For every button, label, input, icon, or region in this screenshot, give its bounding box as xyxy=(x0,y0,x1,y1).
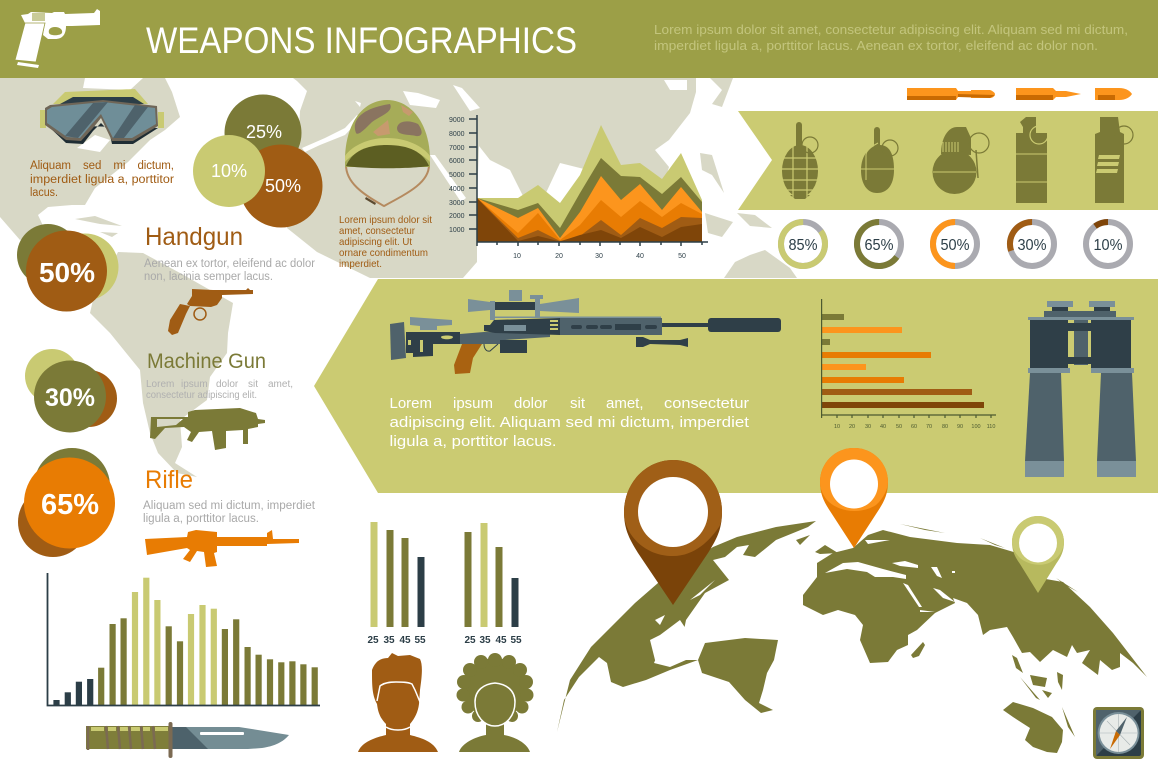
heading: handgun block xyxy=(144,223,315,283)
heading: machine gun block: ipsum xyxy=(181,379,208,390)
title: WEAPONS INFOGRAPHICS xyxy=(146,20,577,61)
stacked area chart: 9000 xyxy=(449,117,465,124)
percentage bubble cluster: 10% xyxy=(211,161,247,181)
horizontal bar chart: 60 xyxy=(911,424,917,430)
stacked area chart: 6000 xyxy=(449,158,465,165)
horizontal bar chart: 70 xyxy=(926,424,932,430)
panel: grenades chevron xyxy=(738,111,1158,210)
world map xyxy=(557,521,1147,753)
icon: compass xyxy=(1093,707,1144,759)
column chart: male ages: 35 xyxy=(383,635,395,646)
column chart: female ages: 45 xyxy=(495,635,507,646)
sniper description text: Lorem xyxy=(390,395,432,412)
bubble: 65% rifle: 65% xyxy=(41,489,99,521)
column chart: male ages xyxy=(367,522,426,646)
icon: machine gun xyxy=(150,408,265,450)
donut: 10% xyxy=(1077,213,1139,275)
bubble: 65% rifle xyxy=(18,448,115,557)
sniper description text: amet, xyxy=(606,395,644,412)
header intro text: Lorem ipsum dolor sit amet, consectetur adipiscing elit. Aliquam sed mi dictum, xyxy=(654,23,1128,37)
helmet caption: imperdiet. xyxy=(339,258,382,270)
sniper description text: sit xyxy=(570,395,586,412)
heading: rifle block: ligula a, porttitor lacus. xyxy=(143,513,259,525)
heading: machine gun block: consectetur adipiscing elit. xyxy=(146,390,257,401)
bubble: 50% handgun xyxy=(17,224,118,312)
horizontal bar chart: 30 xyxy=(865,424,871,430)
heading: machine gun block: Lorem xyxy=(146,379,174,390)
pin: olive xyxy=(1012,516,1064,593)
panel: sniper rifle arrow xyxy=(314,279,1158,493)
horizontal bar chart: 80 xyxy=(942,424,948,430)
stacked area chart: 8000 xyxy=(449,131,465,138)
sniper description text: dolor xyxy=(514,395,547,412)
donut: 50% xyxy=(933,222,977,266)
column chart: female ages: 55 xyxy=(510,635,522,646)
helmet caption: amet, consectetur xyxy=(339,225,415,237)
pin: brown xyxy=(624,460,722,605)
stacked area chart xyxy=(449,115,708,260)
donut: 10%: 10% xyxy=(1094,237,1122,254)
stacked area chart: 40 xyxy=(636,253,644,260)
column chart: female ages: 35 xyxy=(479,635,491,646)
donut: 85%: 85% xyxy=(788,237,818,254)
bar chart: monthly distribution xyxy=(48,573,320,706)
icon: female head xyxy=(456,653,534,752)
heading: rifle block: Rifle xyxy=(145,466,193,494)
heading: rifle block xyxy=(143,466,316,525)
column chart: male ages: 25 xyxy=(367,635,379,646)
heading: handgun block: Aenean ex tortor, eleifend ac dolor xyxy=(144,258,315,270)
sniper description text: ipsum xyxy=(453,395,493,412)
heading: handgun block: non, lacinia semper lacus. xyxy=(144,271,273,283)
header intro text: imperdiet ligula a, porttitor lacus. Aenean ex tortor, eleifend ac dolor non. xyxy=(654,39,1098,53)
donut: 50%: 50% xyxy=(940,237,970,254)
helmet caption: Lorem ipsum dolor sit xyxy=(339,214,432,226)
heading: rifle block: Aliquam sed mi dictum, imperdiet xyxy=(143,500,316,512)
sniper description text xyxy=(390,395,750,450)
heading: machine gun block: amet, xyxy=(268,379,293,390)
percentage bubble cluster: 50% xyxy=(265,176,301,196)
horizontal bar chart: 110 xyxy=(987,424,995,430)
header band xyxy=(0,0,1158,78)
goggles caption: lacus. xyxy=(30,187,58,199)
stacked area chart: 7000 xyxy=(449,145,465,152)
goggles caption: imperdiet ligula a, porttitor xyxy=(30,174,174,186)
stacked area chart: 30 xyxy=(595,253,603,260)
percentage bubble cluster xyxy=(193,94,322,228)
bubble: 30% machine gun xyxy=(25,349,117,432)
heading: machine gun block: sit xyxy=(248,379,258,390)
icon: assault rifle xyxy=(145,530,299,567)
donut: 85% xyxy=(772,213,834,275)
icon: sniper rifle xyxy=(390,290,781,374)
icon: helmet xyxy=(345,100,430,206)
heading: machine gun block: dolor xyxy=(216,379,239,390)
helmet caption xyxy=(339,214,432,270)
column chart: male ages: 45 xyxy=(399,635,411,646)
helmet caption: adipiscing elit. Ut xyxy=(339,236,412,248)
bubble: 50% handgun: 50% xyxy=(39,257,95,288)
sniper description text: adipiscing elit. Aliquam sed mi dictum, imperdiet xyxy=(390,414,750,431)
column chart: female ages: 25 xyxy=(464,635,476,646)
icon: egg grenade xyxy=(861,127,898,193)
heading: machine gun block xyxy=(146,350,293,401)
donut: 65% xyxy=(848,213,910,275)
horizontal bar chart: 100 xyxy=(971,424,981,430)
column chart: female ages xyxy=(464,523,522,646)
stacked area chart: 3000 xyxy=(449,200,465,207)
stacked area chart: 10 xyxy=(513,253,521,260)
percentage bubble cluster: 25% xyxy=(246,122,282,142)
stacked area chart: 5000 xyxy=(449,172,465,179)
pin: orange xyxy=(820,448,888,548)
donut: 30%: 30% xyxy=(1018,237,1046,254)
horizontal bar chart: 10 xyxy=(834,424,840,430)
heading: machine gun block: Machine Gun xyxy=(147,350,266,373)
horizontal bar chart xyxy=(821,299,996,430)
bubble: 30% machine gun: 30% xyxy=(45,384,95,412)
horizontal bar chart: 20 xyxy=(849,424,855,430)
stacked area chart: 50 xyxy=(678,253,686,260)
icon: male head xyxy=(358,653,438,752)
goggles caption: Aliquam sed mi dictum, xyxy=(30,160,174,172)
icons: bullets xyxy=(907,88,1132,100)
sniper description text: consectetur xyxy=(664,395,749,412)
helmet caption: ornare condimentum xyxy=(339,247,428,259)
horizontal bar chart: 40 xyxy=(880,424,886,430)
horizontal bar chart: 90 xyxy=(957,424,963,430)
stacked area chart: 20 xyxy=(555,253,563,260)
heading: handgun block: Handgun xyxy=(145,223,243,251)
icon: round grenade xyxy=(932,127,989,194)
icon: pistol xyxy=(15,9,100,68)
icon: binoculars xyxy=(1025,301,1136,477)
donut: 30% xyxy=(1004,216,1060,272)
icon: goggles xyxy=(40,89,164,144)
stacked area chart: 2000 xyxy=(449,213,465,220)
icon: flash grenade xyxy=(1095,117,1133,203)
goggles caption xyxy=(30,160,174,199)
donut: 65%: 65% xyxy=(864,237,894,254)
icon: smoke grenade xyxy=(1016,117,1048,203)
icon: revolver xyxy=(168,288,253,335)
background world map xyxy=(0,78,797,477)
header intro text xyxy=(654,23,1128,53)
column chart: male ages: 55 xyxy=(414,635,426,646)
stacked area chart: 4000 xyxy=(449,186,465,193)
stacked area chart: 1000 xyxy=(449,227,465,234)
sniper description text: ligula a, porttitor lacus. xyxy=(390,433,556,450)
icon: pineapple grenade xyxy=(782,122,818,199)
icon: combat knife xyxy=(86,722,289,758)
horizontal bar chart: 50 xyxy=(896,424,902,430)
